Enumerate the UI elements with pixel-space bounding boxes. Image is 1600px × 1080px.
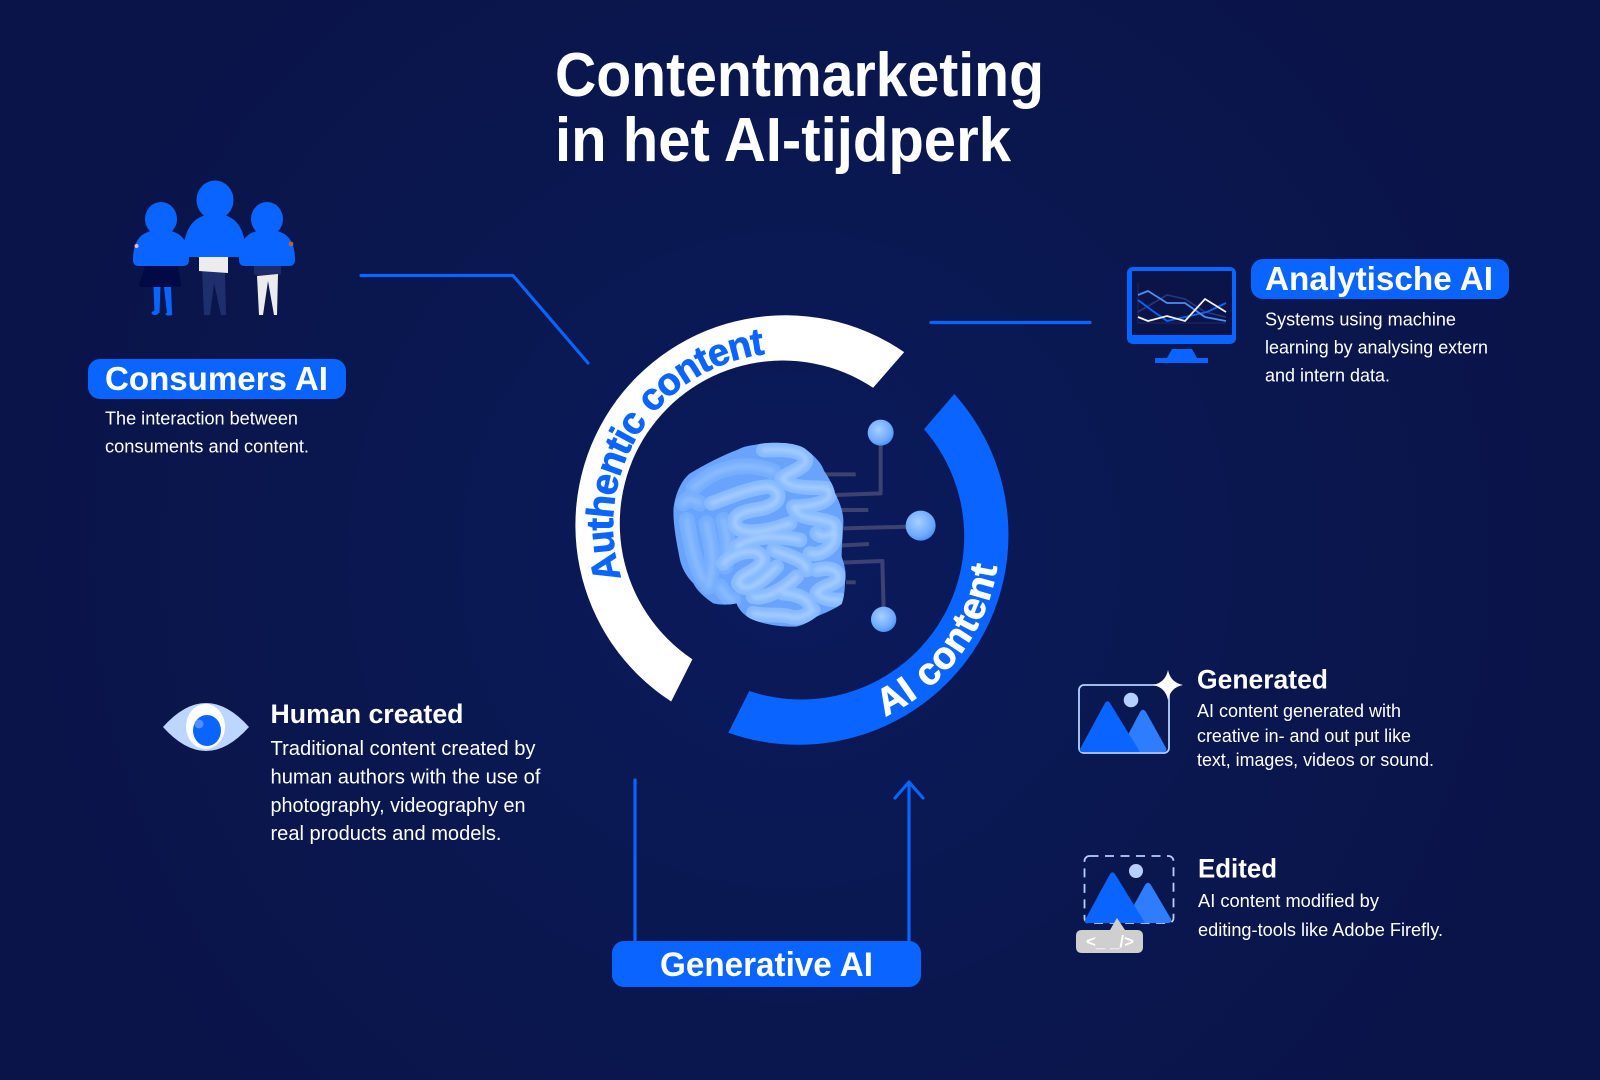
text: edited description [1198, 890, 1443, 940]
icon: digital brain [670, 420, 936, 632]
text: analytische description: Systems using machine [1265, 308, 1456, 330]
icon: generated image with sparkle [1079, 670, 1183, 753]
arrow: generative AI to AI content [895, 782, 923, 944]
brain body [670, 440, 850, 630]
text: analytische description: and intern data. [1265, 364, 1390, 386]
heading: Generated: Generated [1197, 664, 1328, 694]
ring: AI content arc: AI content [881, 563, 998, 717]
text: human created description: Traditional content created by [270, 738, 536, 760]
text: analytische description: learning by analysing extern [1265, 336, 1488, 358]
text: consumers description: The interaction between [105, 408, 298, 428]
heading: Edited: Edited [1198, 854, 1277, 884]
label pill: Generative AI: Generative AI [660, 946, 873, 984]
text: analytische description [1265, 308, 1488, 386]
text: edited description: AI content modified by [1198, 890, 1380, 911]
arrow: left line into generative AI [633, 780, 637, 944]
panel: human created [163, 699, 541, 845]
label pill: Generative AI [612, 941, 921, 987]
text: consumers description [105, 408, 309, 456]
title: in het AI-tijdperk [555, 106, 1011, 175]
icon: group of consumers [133, 180, 295, 316]
text: generated description: creative in- and out put like [1197, 725, 1411, 746]
label pill: Analytische AI: Analytische AI [1265, 260, 1493, 297]
text: consumers description: consuments and content. [105, 436, 309, 456]
icon: monitor with line chart [1127, 267, 1236, 363]
panel: analytische AI [1127, 259, 1509, 386]
icon: edited image with code tag [1076, 856, 1174, 953]
ring: AI content arc [728, 394, 1008, 745]
text: generated description [1197, 700, 1434, 770]
ring: authentic content arc [575, 315, 904, 702]
panel: generated [1079, 664, 1434, 770]
heading: Human created: Human created [270, 699, 464, 729]
text: human created description: human authors with the use of [270, 766, 541, 788]
text: generated description: text, images, videos or sound. [1197, 749, 1434, 770]
text: edited description: editing-tools like Adobe Firefly. [1198, 919, 1443, 940]
title: Contentmarketing [555, 41, 1044, 110]
text: generated description: AI content generated with [1197, 700, 1401, 721]
ring: authentic content arc: Authentic content [585, 330, 766, 578]
label pill: Consumers AI: Consumers AI [105, 360, 328, 397]
text: human created description: real products and models. [270, 823, 502, 845]
icon: eye [163, 703, 249, 751]
text: human created description [270, 738, 541, 845]
panel: generative AI [612, 780, 923, 987]
panel: edited [1076, 854, 1443, 953]
brain nodes [868, 420, 936, 632]
icon: edited image with code tag: <_ _/> [1086, 932, 1134, 951]
text: human created description: photography, videography en [270, 795, 526, 817]
panel: consumers AI [88, 180, 346, 456]
arrow: analytische connector [931, 321, 1090, 324]
brain wires [823, 445, 910, 610]
title [555, 41, 1044, 175]
arrow: consumers connector [361, 276, 588, 363]
